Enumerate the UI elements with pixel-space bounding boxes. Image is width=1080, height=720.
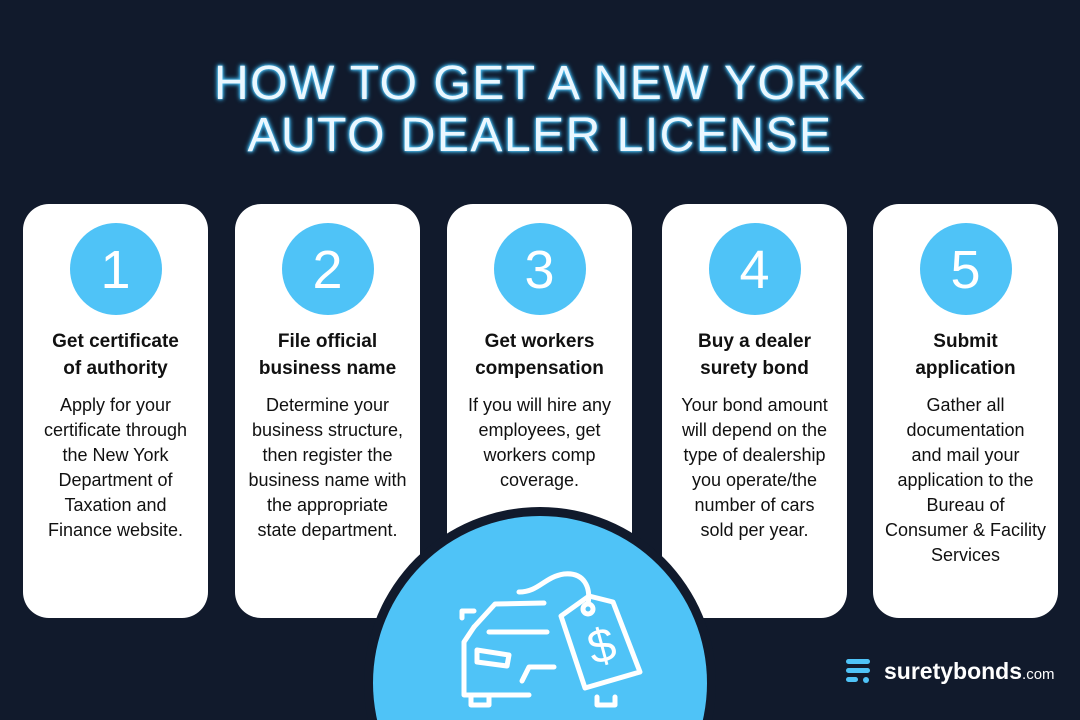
card 4: 4	[739, 240, 770, 300]
card 3: If you will hire any	[468, 395, 611, 415]
card 1: Finance website.	[48, 520, 183, 540]
card 5: application to the	[897, 470, 1034, 490]
card 2: business name with	[248, 470, 407, 490]
card 5: Services	[931, 545, 1000, 565]
card 5: application	[915, 358, 1016, 379]
card 4: sold per year.	[700, 520, 809, 540]
card 1: certificate through	[44, 420, 187, 440]
card 5: Submit	[933, 331, 998, 352]
card 2: then register the	[262, 445, 393, 465]
card 5: Consumer & Facility	[885, 520, 1046, 540]
title: HOW TO GET A NEW YORK	[214, 57, 866, 110]
card 1: Apply for your	[60, 395, 171, 415]
card 5: and mail your	[911, 445, 1020, 465]
icon: car with price tag circle	[373, 507, 707, 720]
card 4: Your bond amount	[681, 395, 828, 415]
card 2: state department.	[257, 520, 398, 540]
card 5: Bureau of	[926, 495, 1005, 515]
title: AUTO DEALER LICENSE	[247, 109, 833, 162]
card 1: Get certificate	[52, 331, 179, 352]
card 1: Taxation and	[64, 495, 167, 515]
card 2: the appropriate	[267, 495, 388, 515]
card 2: 2	[312, 240, 343, 300]
card 3: coverage.	[500, 470, 579, 490]
card 4: will depend on the	[682, 420, 827, 440]
card 2: business structure,	[252, 420, 403, 440]
card 1	[23, 204, 208, 618]
card 3	[447, 204, 632, 618]
logo: suretybonds.com	[884, 658, 1055, 684]
card 5: documentation	[906, 420, 1025, 440]
card 2: File official	[278, 331, 377, 352]
card 4: Buy a dealer	[698, 331, 811, 352]
card 3: compensation	[475, 358, 604, 379]
card 3: Get workers	[485, 331, 594, 352]
card 1: of authority	[63, 358, 168, 379]
card 4: you operate/the	[692, 470, 817, 490]
card 4: type of dealership	[683, 445, 826, 465]
card 4: number of cars	[694, 495, 815, 515]
card 3: 3	[524, 240, 555, 300]
card 2: Determine your	[266, 395, 389, 415]
card 5: Gather all	[926, 395, 1005, 415]
card 2: business name	[259, 358, 396, 379]
title	[213, 57, 867, 162]
card 1: 1	[100, 240, 131, 300]
icon: car with price tag circle: $	[582, 617, 622, 676]
card 5	[873, 204, 1058, 618]
card 1: the New York	[62, 445, 169, 465]
card 5: 5	[950, 240, 981, 300]
card 2	[235, 204, 420, 618]
card 1: Department of	[58, 470, 173, 490]
card 4	[662, 204, 847, 618]
card 4: surety bond	[700, 358, 809, 379]
card 3: workers comp	[483, 445, 596, 465]
card 3: employees, get	[478, 420, 601, 440]
